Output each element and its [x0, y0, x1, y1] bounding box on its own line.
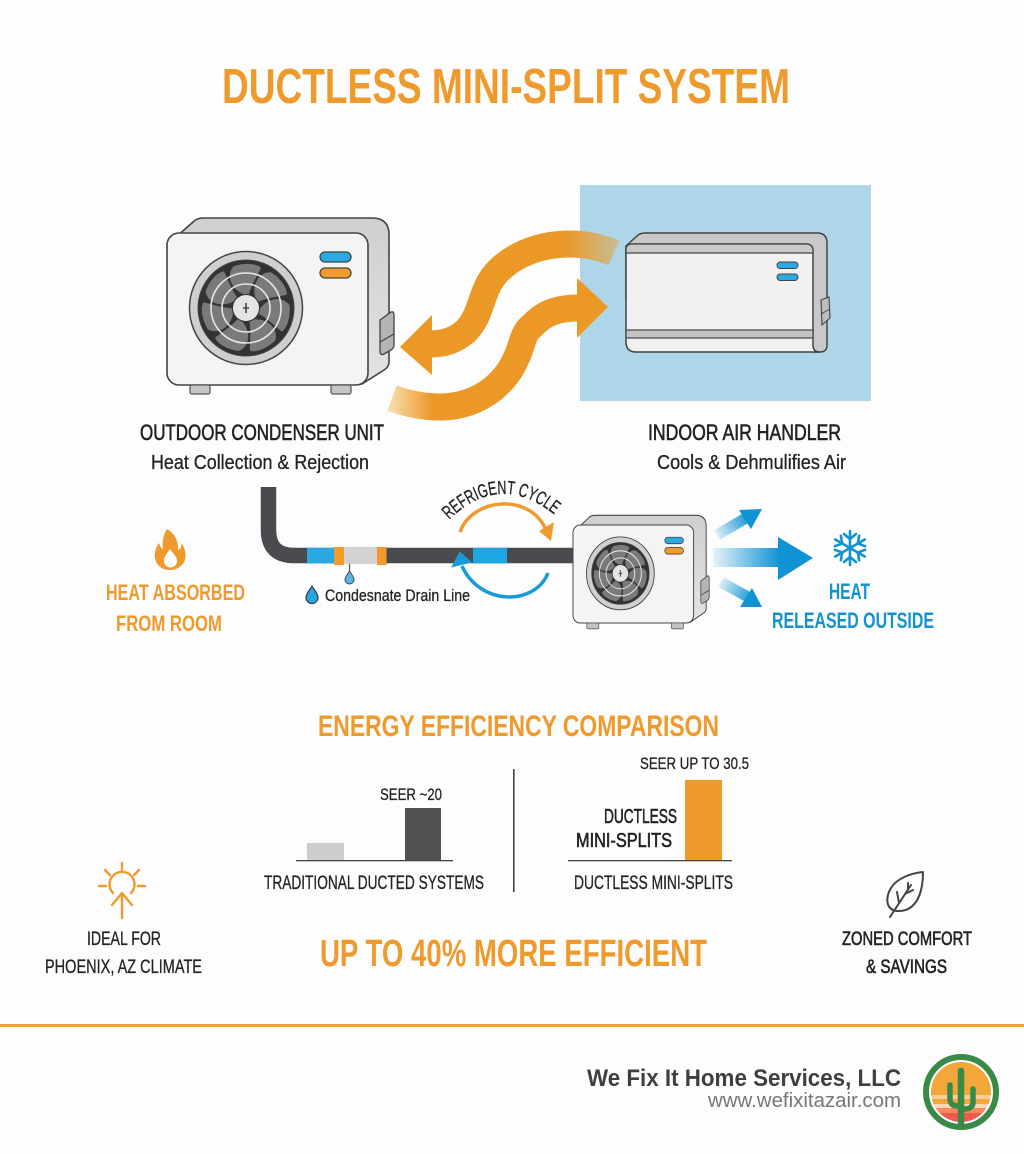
label: zoned comfort: [842, 929, 972, 978]
arrow: heat released lower: [721, 582, 762, 607]
label: ideal for phoenix: PHOENIX, AZ CLIMATE: [45, 957, 202, 978]
heading: energy efficiency comparison: ENERGY EFFICIENCY COMPARISON: [318, 710, 719, 743]
bar chart: ductless mini-splits: [568, 754, 749, 894]
arrow: heat released main: [713, 537, 813, 580]
icon: sun with arrow: [99, 863, 145, 918]
label: outdoor condenser: OUTDOOR CONDENSER UNIT: [140, 420, 384, 445]
footer rule: [0, 1024, 1024, 1027]
icon: flame: [155, 529, 186, 570]
label: heat absorbed from room: [106, 580, 245, 636]
label: outdoor condenser: Heat Collection & Rejection: [151, 452, 369, 474]
icon: leaf: [887, 872, 923, 917]
bar chart: ductless mini-splits: DUCTLESS: [604, 806, 677, 828]
label: indoor air handler: [648, 420, 846, 474]
arrow: flow to indoor unit: [392, 278, 608, 407]
label: zoned comfort: & SAVINGS: [866, 957, 947, 978]
bar chart: ductless mini-splits: SEER UP TO 30.5: [640, 754, 749, 773]
footer: website: www.wefixitazair.com: [707, 1090, 901, 1112]
bar chart: traditional ducted systems: SEER ~20: [380, 785, 442, 804]
label: heat absorbed from room: HEAT ABSORBED: [106, 580, 245, 605]
outdoor condenser unit: [167, 218, 394, 394]
icon: water drop: [306, 586, 318, 604]
label: heat released outside: RELEASED OUTSIDE: [772, 608, 934, 633]
arrow: return flow to outdoor unit: [400, 244, 614, 375]
logo: [923, 1054, 999, 1130]
label: zoned comfort: ZONED COMFORT: [842, 929, 972, 950]
label: heat absorbed from room: FROM ROOM: [116, 611, 222, 636]
label: outdoor condenser: [140, 420, 384, 474]
arrow: orange refrigerant cycle: [460, 504, 554, 541]
icon: drip from pipe: [345, 564, 354, 584]
label: heat released outside: [772, 579, 934, 633]
footer: company name: We Fix It Home Services, LLC: [587, 1065, 901, 1092]
label: refrigerant cycle: REFRIGENT CYCLE: [441, 480, 562, 520]
bar chart: traditional ducted systems: TRADITIONAL DUCTED SYSTEMS: [264, 873, 484, 894]
bar chart: ductless mini-splits: MINI-SPLITS: [576, 830, 672, 852]
refrigerant pipe: [268, 487, 575, 565]
label: heat released outside: HEAT: [829, 579, 870, 604]
label: ideal for phoenix: [45, 929, 202, 978]
icon: snowflake: [832, 531, 868, 565]
label: indoor air handler: INDOOR AIR HANDLER: [648, 420, 841, 445]
label: condensate drain line: Condesnate Drain Line: [325, 586, 470, 605]
arrow: blue refrigerant cycle: [453, 553, 548, 597]
divider: [513, 769, 515, 892]
title: DUCTLESS MINI-SPLIT SYSTEM: [222, 60, 790, 114]
small condenser unit: [573, 515, 709, 629]
bar chart: ductless mini-splits: DUCTLESS MINI-SPLITS: [574, 873, 733, 894]
label: ideal for phoenix: IDEAL FOR: [87, 929, 161, 950]
bar chart: traditional ducted systems: [264, 785, 484, 894]
callout: up to 40% more efficient: UP TO 40% MORE EFFICIENT: [320, 933, 707, 975]
arrow: heat released upper: [717, 509, 762, 535]
indoor air handler unit: [626, 233, 830, 352]
label: indoor air handler: Cools & Dehmulifies Air: [657, 452, 846, 474]
panel: indoor room background: [580, 185, 871, 401]
